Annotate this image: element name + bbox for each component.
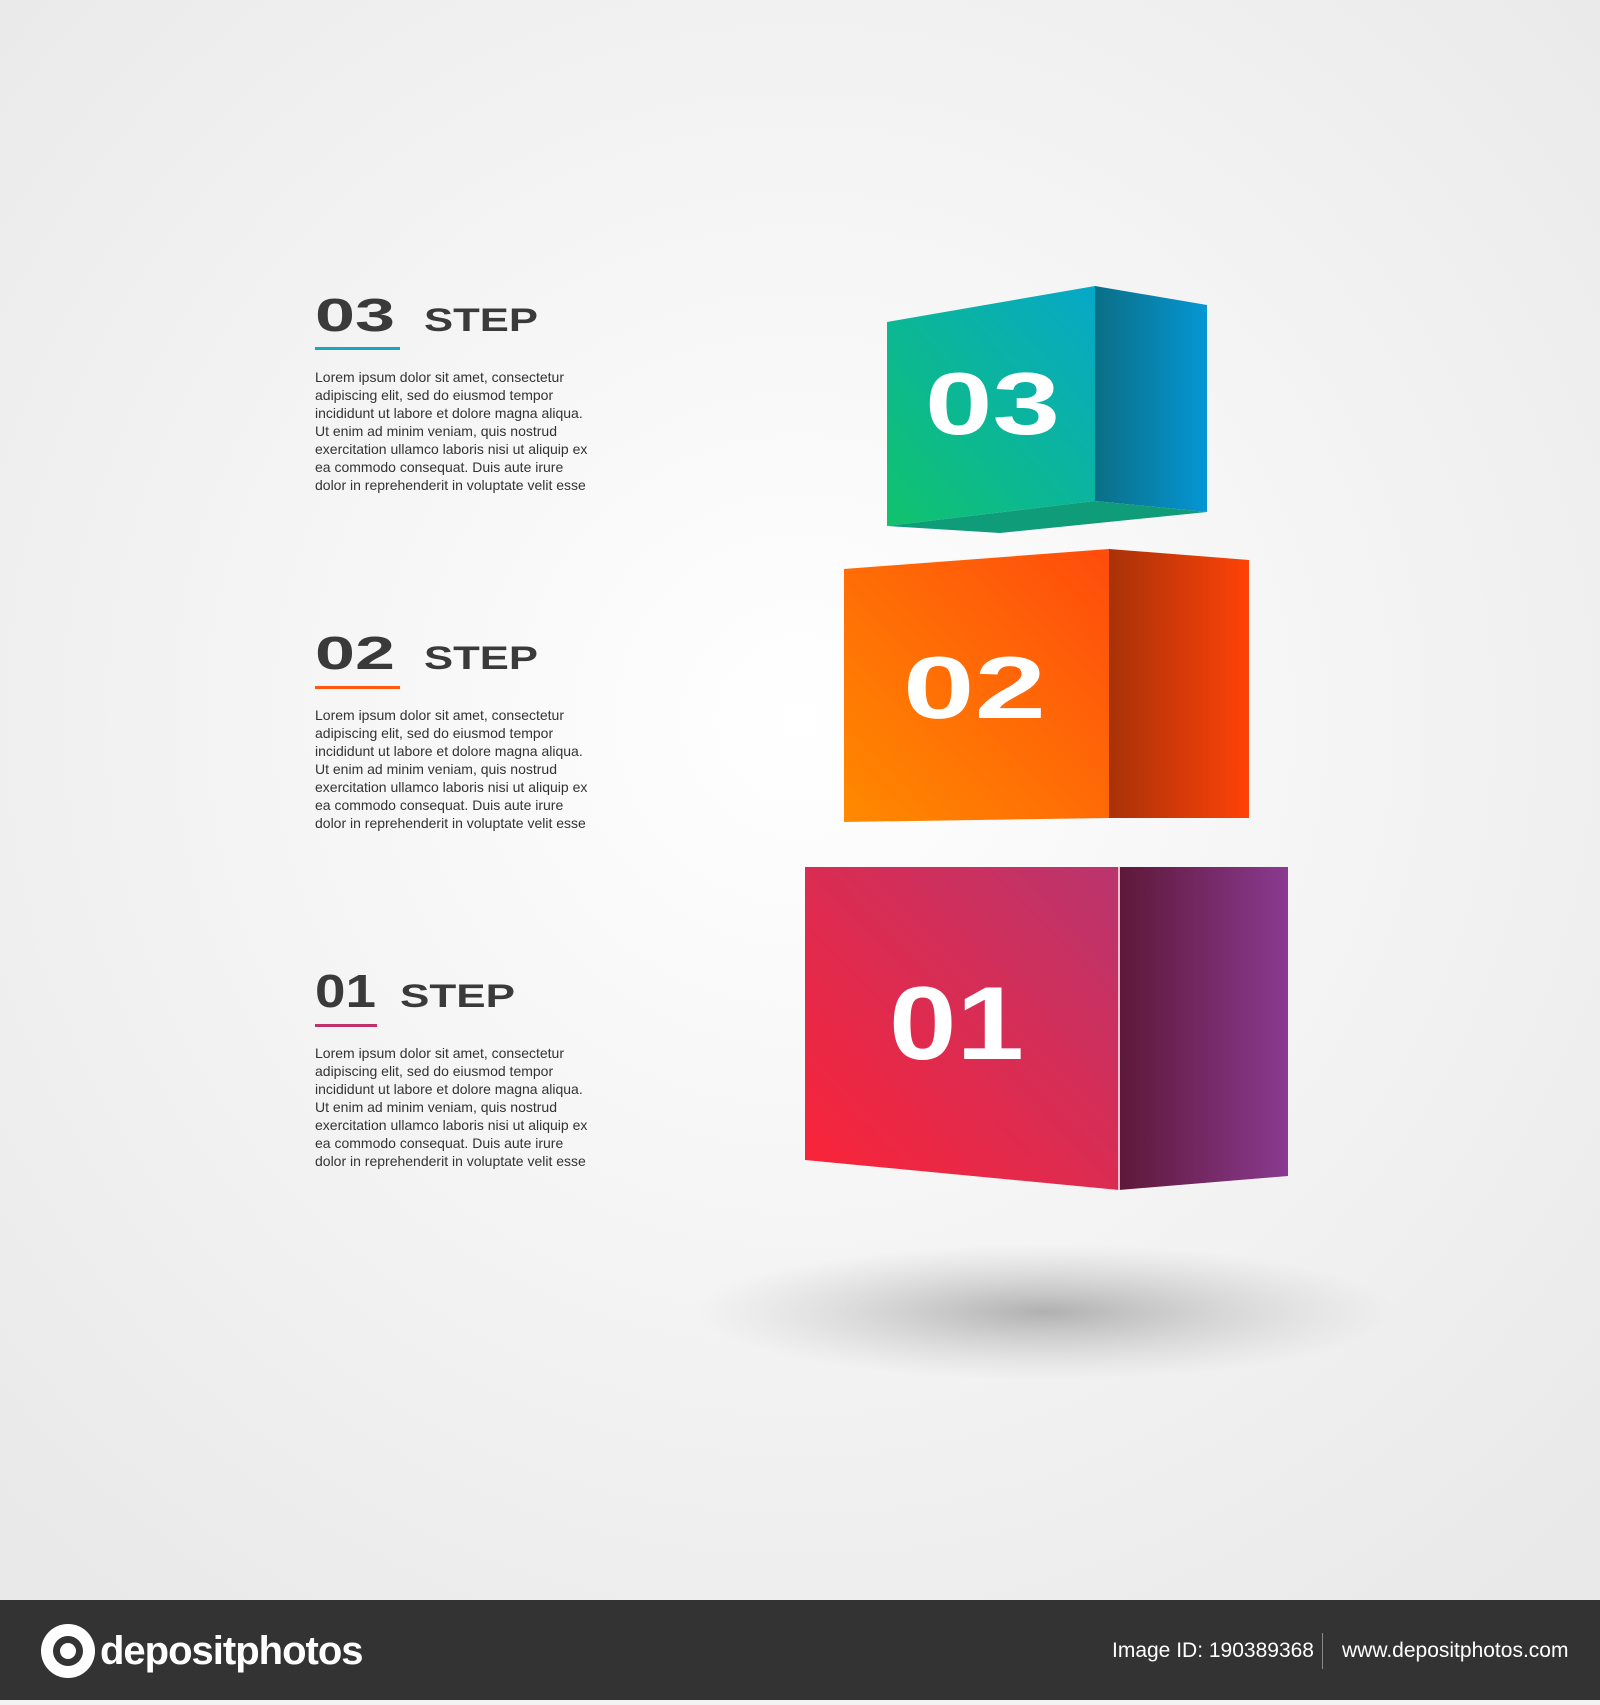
step 03 text: ea commodo consequat. Duis aute irure: [315, 459, 563, 475]
step 01 text: exercitation ullamco laboris nisi ut aliquip ex: [315, 1117, 587, 1133]
box 03: 03: [925, 354, 1060, 453]
step 02 text: [315, 627, 587, 831]
footer bar: [0, 1600, 1600, 1700]
step 01 text: 01: [315, 965, 376, 1017]
box 02: [844, 549, 1249, 822]
step 03 text: incididunt ut labore et dolore magna aliqua.: [315, 405, 583, 421]
footer bar: www.depositphotos.com: [1341, 1639, 1568, 1662]
step 01 text: Lorem ipsum dolor sit amet, consectetur: [315, 1045, 564, 1061]
footer bar: depositphotos: [100, 1629, 363, 1673]
footer bar: Image ID: 190389368: [1112, 1639, 1314, 1662]
step 02 text: STEP: [424, 640, 538, 676]
step 02 text: dolor in reprehenderit in voluptate velit esse: [315, 815, 586, 831]
step 02 text: 02: [315, 627, 395, 679]
step 03 text: Ut enim ad minim veniam, quis nostrud: [315, 423, 557, 439]
step 03 text: exercitation ullamco laboris nisi ut aliquip ex: [315, 441, 587, 457]
step 01 text: adipiscing elit, sed do eiusmod tempor: [315, 1063, 553, 1079]
step 01 text: [315, 965, 587, 1169]
step 01 text: Ut enim ad minim veniam, quis nostrud: [315, 1099, 557, 1115]
step 02 text: Ut enim ad minim veniam, quis nostrud: [315, 761, 557, 777]
box 03: [887, 286, 1207, 533]
step 03 text: [315, 289, 587, 493]
shadow: [695, 1244, 1395, 1380]
step 01 text: incididunt ut labore et dolore magna aliqua.: [315, 1081, 583, 1097]
step 02 text: adipiscing elit, sed do eiusmod tempor: [315, 725, 553, 741]
step 01 text: dolor in reprehenderit in voluptate velit esse: [315, 1153, 586, 1169]
box 01: [805, 867, 1288, 1190]
step 03 text: adipiscing elit, sed do eiusmod tempor: [315, 387, 553, 403]
step 03 text: 03: [315, 289, 395, 341]
box 02: 02: [903, 638, 1046, 737]
step 01 text: ea commodo consequat. Duis aute irure: [315, 1135, 563, 1151]
step 01 text: STEP: [400, 978, 515, 1014]
step 02 text: incididunt ut labore et dolore magna aliqua.: [315, 743, 583, 759]
step 03 text: STEP: [424, 302, 538, 338]
step 03 text: Lorem ipsum dolor sit amet, consectetur: [315, 369, 564, 385]
step 02 text: Lorem ipsum dolor sit amet, consectetur: [315, 707, 564, 723]
step 03 text: dolor in reprehenderit in voluptate velit esse: [315, 477, 586, 493]
box 01: 01: [889, 966, 1024, 1082]
step 02 text: exercitation ullamco laboris nisi ut aliquip ex: [315, 779, 587, 795]
step 02 text: ea commodo consequat. Duis aute irure: [315, 797, 563, 813]
